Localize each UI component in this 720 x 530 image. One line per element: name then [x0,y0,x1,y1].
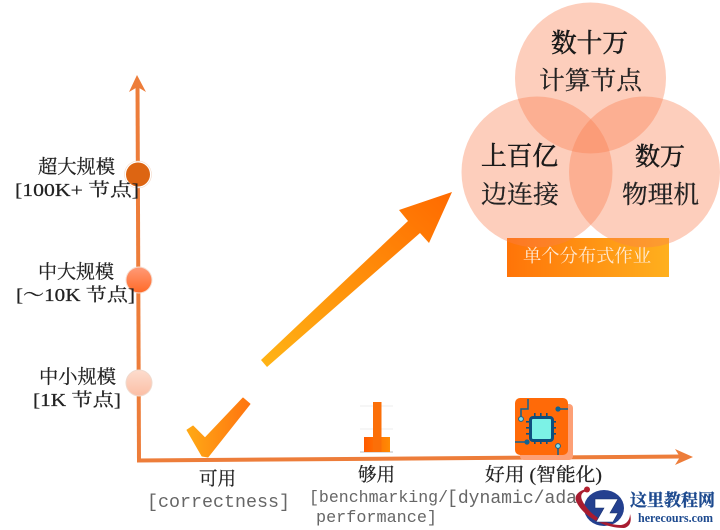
venn text: physical machines [622,143,699,209]
venn diagram [462,2,720,248]
label: 中小规模 [33,366,121,410]
x label: usable [147,469,290,513]
x label: usable: [correctness] [147,493,290,513]
logo text: 这里教程网 [630,491,715,510]
venn text: edges: 上百亿 [481,142,558,171]
venn text: physical machines: 数万 [635,143,685,171]
x label: sufficient: performance] [316,509,437,528]
logo url: herecours.com [638,510,713,525]
scale marker: large [126,266,152,294]
watermark logo [575,486,715,528]
icon: check mark [187,398,250,457]
icon: bar chart [360,402,393,452]
venn text: edges [481,142,560,209]
label: 中小规模: 中小规模 [39,366,116,388]
y axis arrow [129,75,146,462]
label: 中大规模: 中大规模 [38,261,114,283]
banner: single distributed job [507,238,669,277]
scale marker: very large [124,161,152,188]
x label: good: [dynamic/ada [447,489,577,509]
label: 超大规模: 超大规模 [38,156,115,178]
x label: sufficient: 够用 [358,465,395,486]
venn text: compute nodes: 计算节点 [539,67,643,95]
venn text: compute nodes: 数十万 [551,29,628,58]
venn text: edges: 边连接 [481,181,560,209]
x label: good: 好用 (智能化) [485,465,602,486]
x label: sufficient: [benchmarking/ [309,489,448,508]
label: 超大规模: [100K+ 节点] [15,180,139,200]
label: 中大规模: [～10K 节点] [16,285,135,305]
label: 中小规模: [1K 节点] [33,390,121,410]
banner: single distributed job: 单个分布式作业 [523,246,651,266]
venn text: compute nodes [539,29,643,95]
x label: good [447,465,602,509]
x label: sufficient [309,465,448,528]
label: 中大规模 [16,261,135,305]
label: 超大规模 [15,156,139,200]
logo mark [575,486,631,528]
venn text: physical machines: 物理机 [622,181,699,209]
large growth arrow [261,192,452,367]
x axis arrow [137,449,693,465]
icon: chip [515,398,573,460]
x label: usable: 可用 [199,469,236,490]
scale marker: small [126,370,152,396]
